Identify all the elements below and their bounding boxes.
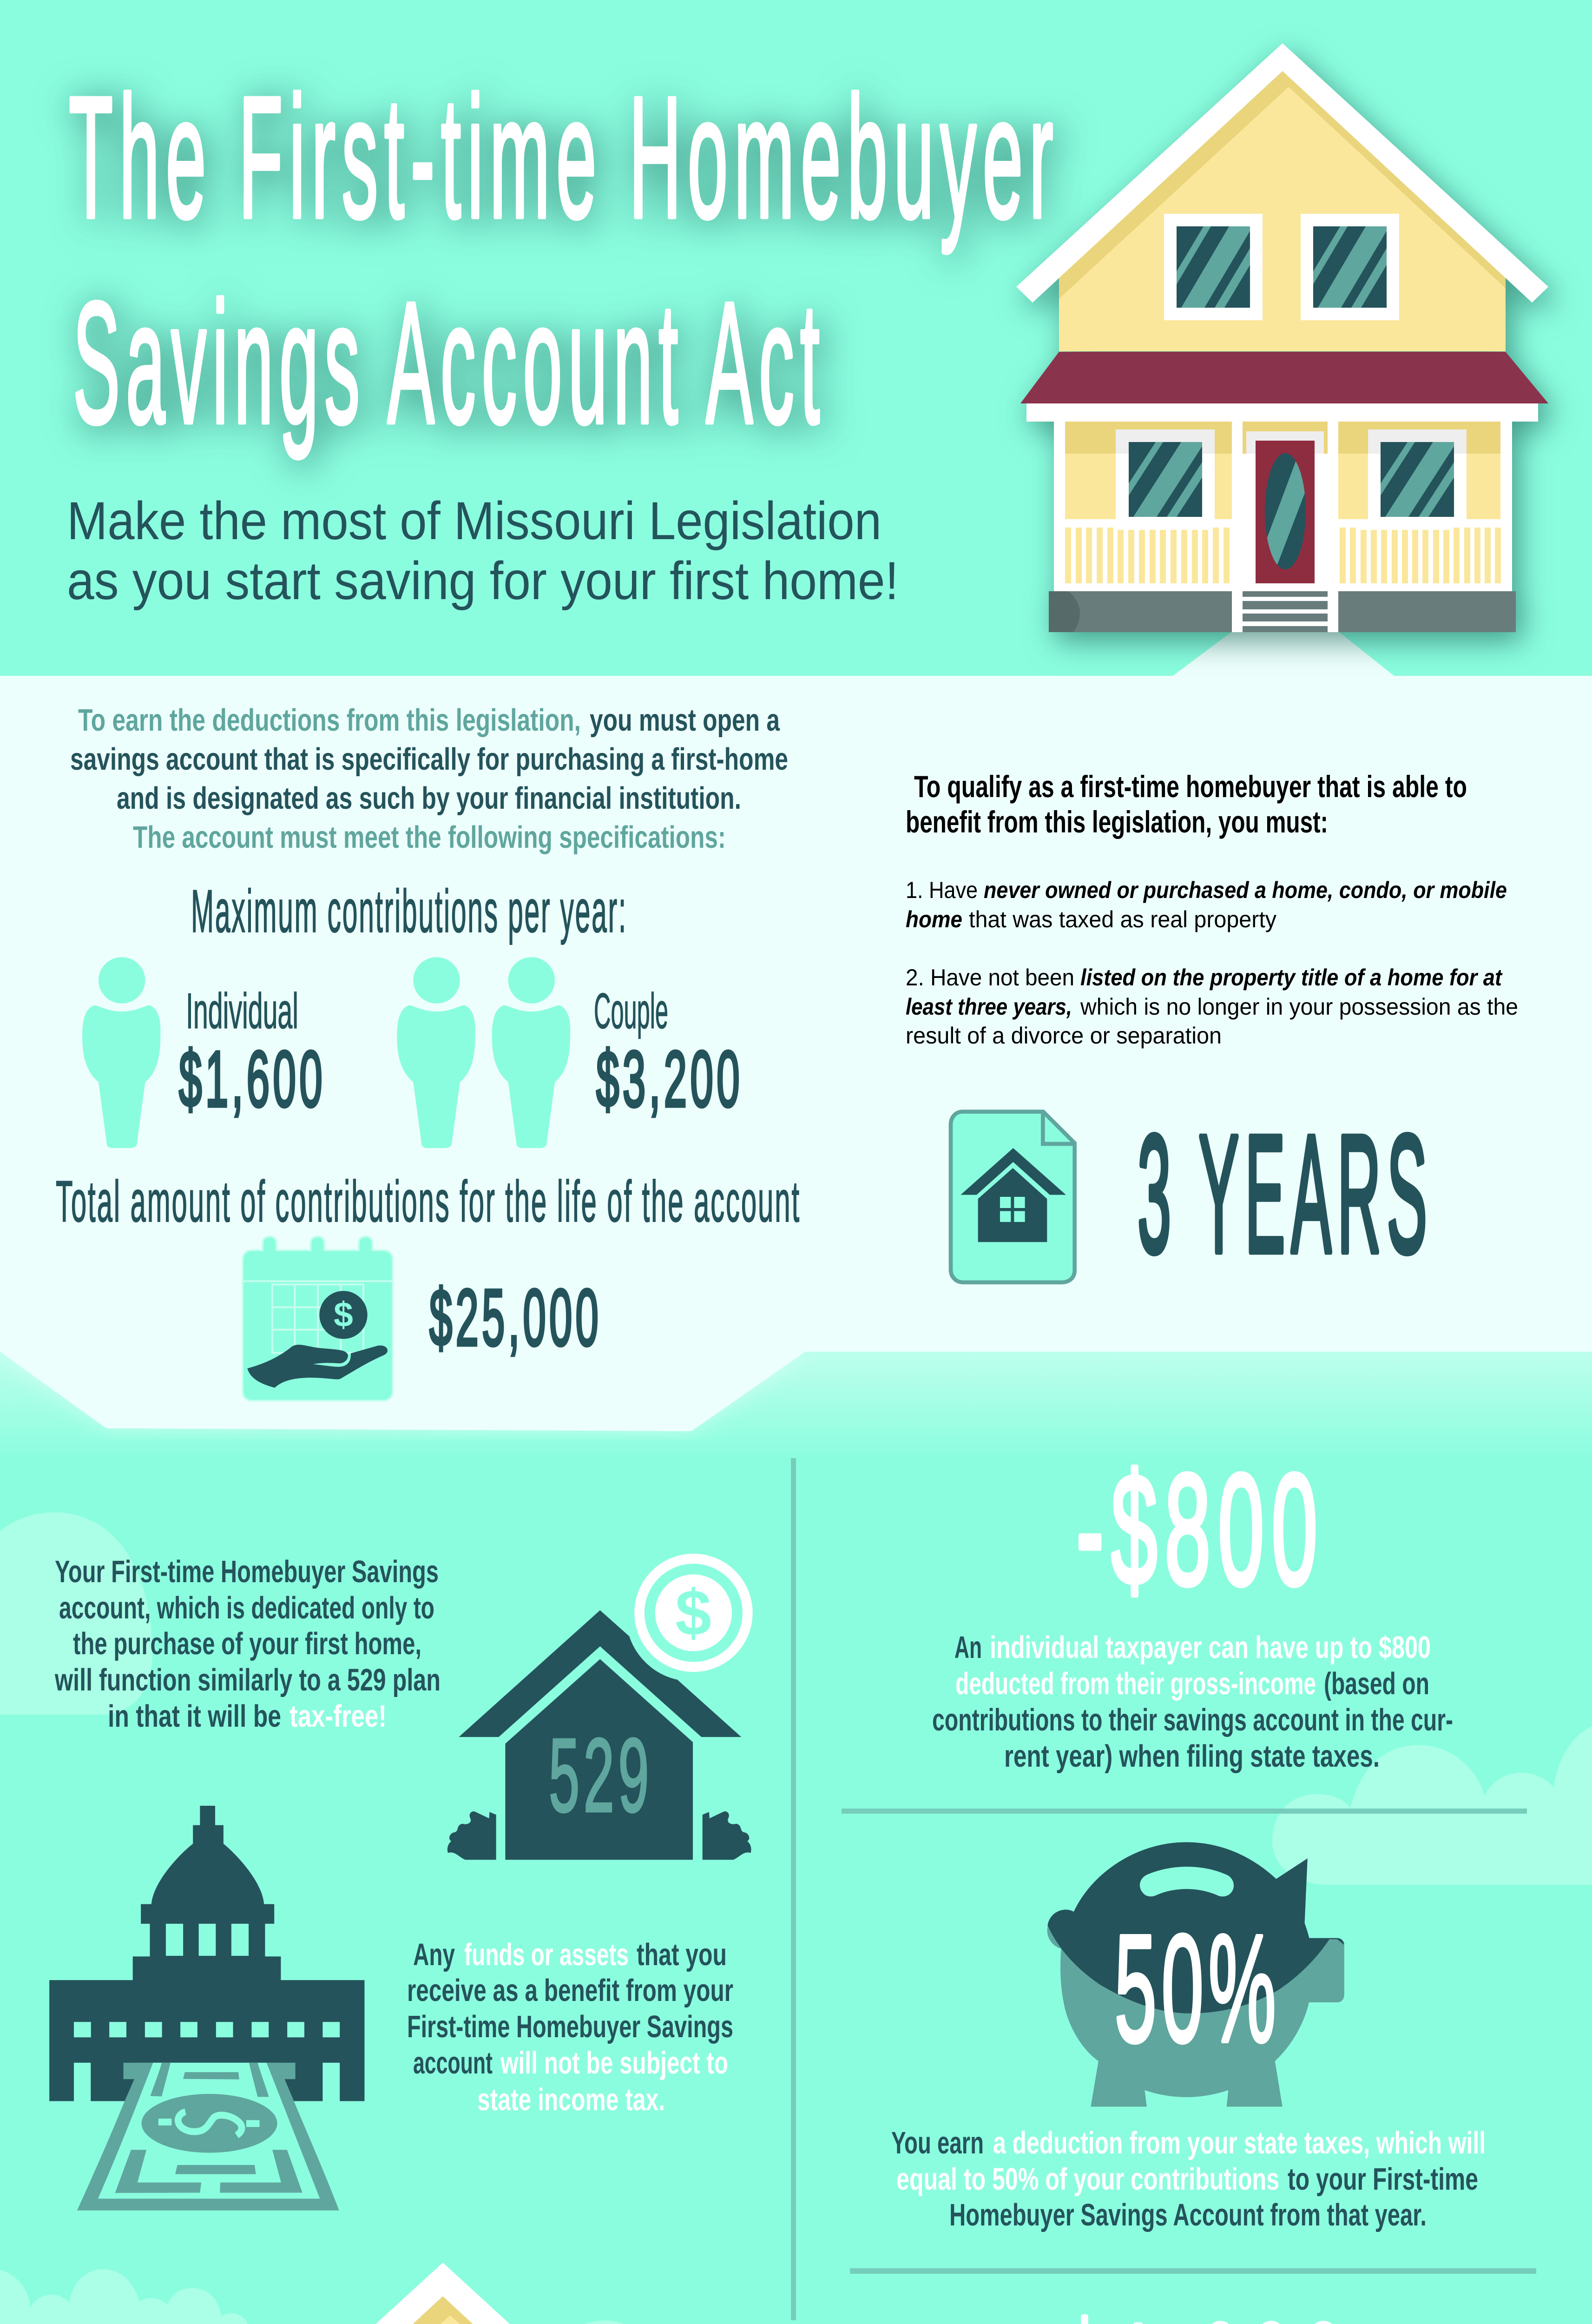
text block: state income tax: that you (637, 1937, 727, 1972)
text block: qualification rules: never owned or purchased a home, condo, or mobile (984, 877, 1507, 903)
illustration: top house (1016, 43, 1548, 632)
text block: 529 comparison: in that it will be (108, 1699, 281, 1734)
text block: 529 comparison: tax-free! (289, 1699, 387, 1734)
text block: state income tax (407, 1937, 733, 2117)
text block: how to earn deductions: The account must meet the following specifications: (133, 820, 726, 855)
text block: how to earn deductions (70, 703, 788, 855)
text block: 529 comparison: account, which is dedicated only to (59, 1591, 434, 1625)
stat: couple (594, 983, 743, 1123)
text block: 529 comparison: will function similarly to a 529 plan (54, 1663, 441, 1697)
stat: individual: $1,600 (179, 1035, 326, 1123)
text block: state income tax: funds or assets (464, 1937, 629, 1972)
cloud: upper left (0, 1512, 152, 1715)
icon: couple (397, 957, 570, 1148)
text block: individual deduction: deducted from their gross-income (955, 1666, 1316, 1701)
section glow under light panel (0, 1352, 1592, 1459)
icon: calendar with coin and hand: $ (334, 1295, 353, 1334)
text block: state income tax: account (413, 2046, 493, 2080)
text block: state income tax: receive as a benefit from your (407, 1973, 733, 2008)
text block: state income tax: will not be subject to (500, 2046, 728, 2080)
text block: 50 percent deduction: equal to 50% of your contributions (896, 2162, 1279, 2197)
text block: 50 percent deduction: You earn (891, 2126, 984, 2160)
text block: how to earn deductions: savings account that is specifically for purchasing a first-home (70, 742, 788, 777)
text block: individual deduction: rent year) when filing state taxes. (1004, 1739, 1380, 1774)
text block: qualification rules: that was taxed as real property (969, 906, 1276, 932)
text block: 50 percent deduction (891, 2126, 1486, 2232)
text block: state income tax: state income tax. (477, 2082, 665, 2117)
icon: capitol building with money (49, 1806, 364, 2211)
icon: 529 house with coin: $ (675, 1576, 711, 1649)
text block: 529 comparison: Your First-time Homebuyer Savings (55, 1554, 439, 1589)
text block: qualification heading (906, 769, 1467, 839)
stat: lifetime total: $25,000 (429, 1273, 602, 1362)
text block: how to earn deductions: and is designated as such by your financial institution. (117, 781, 741, 816)
walkway (1173, 632, 1394, 676)
subtitle: Make the most of Missouri Legislation (67, 491, 882, 551)
text: Total amount of contributions for the life of the account (56, 1169, 801, 1234)
icon: 529 house with coin: 529 (549, 1717, 653, 1834)
panel: account requirements (0, 676, 1592, 1431)
stat: individual (179, 983, 326, 1123)
illustration: bottom house (123, 2263, 763, 2324)
subtitle (67, 491, 899, 611)
text block: state income tax: First-time Homebuyer Savings (407, 2009, 733, 2044)
text block: qualification rules: result of a divorce or separation (906, 1023, 1222, 1049)
text block: individual deduction: individual taxpayer can have up to $800 (990, 1630, 1431, 1665)
text block: qualification heading: benefit from this legislation, you must: (906, 805, 1328, 839)
text block: 50 percent deduction: Homebuyer Savings Account from that year. (949, 2198, 1427, 2232)
text block: how to earn deductions: you must open a (590, 703, 780, 738)
cloud: behind lower house (555, 2320, 793, 2324)
text block: qualification rules: 2. Have not been (906, 964, 1074, 990)
title (69, 60, 1059, 460)
icon: individual person (82, 957, 161, 1148)
text block: individual deduction: An (954, 1630, 982, 1665)
stat: couple: $3,200 (596, 1035, 743, 1123)
icon: 529 house with coin (447, 1554, 753, 1860)
text block: individual deduction (932, 1630, 1453, 1774)
text block: qualification rules: 1. Have (906, 877, 978, 903)
cloud: lower left (0, 2269, 249, 2324)
icon: calendar with coin and hand (243, 1236, 393, 1401)
text block: 529 comparison (54, 1554, 441, 1734)
subtitle: as you start saving for your first home! (67, 551, 899, 611)
stat: couple: Couple (594, 983, 668, 1039)
text block: individual deduction: (based on (1324, 1666, 1429, 1701)
stat: individual: Individual (186, 983, 298, 1039)
icon: document with house (951, 1112, 1075, 1282)
text block: qualification rules (906, 877, 1518, 1049)
text block: 529 comparison: the purchase of your first home, (73, 1626, 421, 1661)
cloud: right (1272, 1726, 1592, 1885)
text block: qualification rules: which is no longer in your possession as the (1080, 994, 1518, 1020)
text block: state income tax: Any (413, 1937, 455, 1972)
text block: qualification rules: least three years, (906, 994, 1072, 1020)
text block: 50 percent deduction: to your First-time (1288, 2162, 1478, 2197)
text block: qualification rules: home (906, 906, 962, 932)
text block: qualification rules: listed on the property title of a home for at (1080, 964, 1503, 990)
text: Maximum contributions per year: (191, 877, 627, 945)
text block: how to earn deductions: To earn the deductions from this legislation, (78, 703, 581, 738)
icon: piggy bank: 50% (1114, 1902, 1281, 2074)
stat: minus 800: -$800 (1076, 1441, 1325, 1618)
icon: piggy bank (1047, 1842, 1344, 2107)
